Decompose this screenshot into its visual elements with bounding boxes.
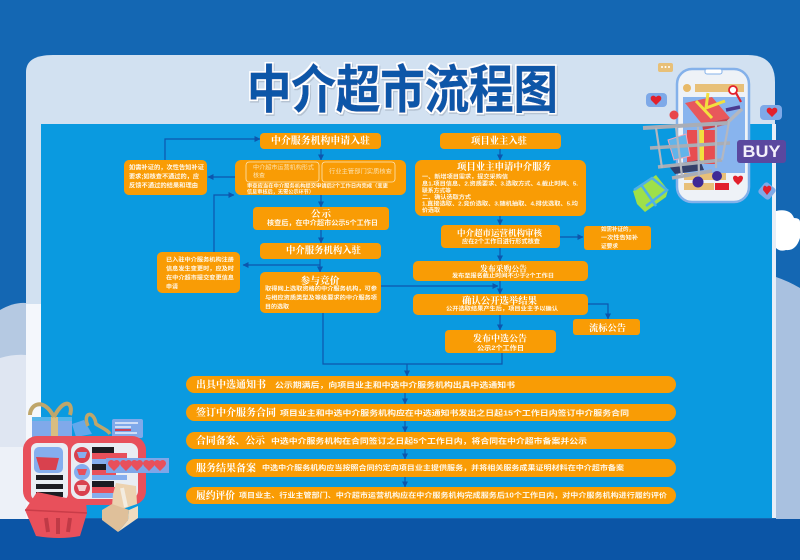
title: 中介超市流程图	[247, 49, 558, 124]
note: one-time notice: 证要求	[601, 242, 618, 250]
step: owner enters	[440, 133, 561, 149]
illustration: online shop with basket	[23, 404, 169, 538]
connector arrows	[165, 139, 608, 487]
note: info change: 已入驻中介服务机构注册	[166, 256, 234, 264]
bar: performance evaluation: 项目业主、行业主管部门、中介超市运营机构应在中介服务机构完成服务后10个工作日内，对中介服务机构进行履约评价	[239, 491, 667, 500]
bar: selection notice: 公示期满后，向项目业主和中选中介服务机构出具中选通知书	[275, 380, 516, 390]
bar: sign contract: 签订中介服务合同	[196, 406, 276, 419]
step: failed tender notice: 流标公告	[589, 322, 626, 333]
bar: contract filing	[186, 432, 676, 449]
bar: selection notice	[186, 376, 676, 393]
step: agency application	[260, 133, 381, 149]
step: review: 审查应当在中介服务机构提交申请后2个工作日内完成（变更	[247, 183, 388, 190]
note: one-time notice	[584, 225, 651, 250]
illustration: phone and shopping cart	[633, 63, 786, 212]
step: owner applies: 1.直接选取、2.竞价选取、3.随机抽取、4.排优选取、5.均	[422, 200, 579, 208]
step: agency enters: 中介服务机构入驻	[286, 244, 361, 256]
bar: performance evaluation: 履约评价	[196, 489, 235, 502]
step: failed tender notice	[573, 319, 640, 335]
step: owner applies: 息1.项目信息、2.资质要求、3.选取方式、4.截止时间、5.	[422, 180, 579, 188]
step: bidding: 与相应资质类型及等级要求的中介服务项	[265, 294, 377, 302]
bar: sign contract: 项目业主和中选中介服务机构应在中选通知书发出之日起15个工作日内签订中介服务合同	[280, 408, 629, 418]
step: agency application: 中介服务机构申请入驻	[271, 134, 370, 147]
step: confirm result: 公开选取结果产生后，项目业主予以确认	[446, 305, 558, 313]
note: info change: 信息发生变更时，应及时	[166, 265, 234, 273]
note: info change: 申请	[166, 283, 178, 291]
note: one-time notice: 如需补证的，	[601, 225, 634, 233]
step: procurement notice: 发布采购公告	[480, 263, 527, 273]
step: owner applies	[415, 160, 586, 216]
step: operator review: 应在2个工作日进行形式核查	[462, 238, 540, 246]
step: bidding: 参与竞价	[300, 274, 340, 287]
step: review: 行业主管部门实质核查	[329, 168, 392, 176]
step: owner applies: 联系方式等	[422, 187, 452, 195]
step: owner applies: 二、确认选取方式	[422, 193, 472, 201]
bar: contract filing: 中选中介服务机构在合同签订之日起5个工作日内，将合同在中介超市备案并公示	[271, 436, 588, 446]
step: operator review: 中介超市运营机构审核	[457, 228, 543, 238]
step: publicity: 公 示	[311, 209, 332, 220]
step: owner applies: 价选取	[422, 206, 441, 214]
step: review: 核查	[253, 172, 265, 180]
step: confirm result: 确认公开选举结果	[462, 295, 537, 307]
bar: service result filing	[186, 459, 676, 477]
bar: service result filing: 中选中介服务机构应当按照合同约定向项目业主提供服务，并将相关服务成果证明材料在中介超市备案	[262, 463, 624, 472]
step: winner notice: 公示2个工作日	[477, 343, 524, 352]
note: supplement materials: 反馈不通过的结果和理由	[129, 182, 198, 190]
note: supplement materials	[124, 160, 207, 195]
note: info change	[157, 252, 240, 293]
bar: selection notice: 出具中选通知书	[196, 378, 267, 391]
note: info change: 在中介超市提交变更信息	[166, 274, 234, 282]
bar: sign contract	[186, 404, 676, 421]
step: operator review	[441, 225, 560, 248]
note: one-time notice: 一次性告知补	[601, 234, 639, 242]
step: confirm result	[413, 294, 588, 315]
illustration: phone and shopping cart: BUY	[742, 142, 781, 161]
step: bidding: 取得网上选取资格的中介服务机构，可参	[265, 285, 377, 293]
step: owner applies: 项目业主申请中介服务	[457, 161, 551, 173]
bar: performance evaluation	[186, 487, 676, 504]
note: supplement materials: 如需补证的，次性告知补证	[129, 164, 204, 172]
note: supplement materials: 要求;如核查不通过的，应	[129, 173, 199, 181]
step: owner enters: 项目业主入驻	[471, 135, 527, 147]
step: owner applies: 一、新增项目需求，提交采购信	[422, 173, 509, 181]
step: winner notice	[445, 330, 556, 353]
step: publicity: 核查后，在中介超市公示5个工作日	[267, 218, 378, 227]
step: procurement notice: 发布至报名截止时间不少于2个工作日	[452, 272, 554, 280]
step: bidding	[260, 272, 381, 313]
bar: service result filing: 服务结果备案	[196, 461, 256, 474]
step: publicity	[253, 207, 389, 230]
step: review: 信息审核后，无需公示环节）	[247, 189, 314, 196]
step: bidding: 目的选取	[265, 303, 289, 311]
step: review	[235, 160, 406, 196]
bar: contract filing: 合同备案、公示	[196, 434, 266, 447]
main blue panel	[41, 124, 772, 518]
step: procurement notice	[413, 261, 588, 281]
step: review: 中介超市运营机构形式	[253, 164, 314, 172]
step: winner notice: 发布中选公告	[473, 332, 527, 343]
step: agency enters	[260, 243, 381, 259]
